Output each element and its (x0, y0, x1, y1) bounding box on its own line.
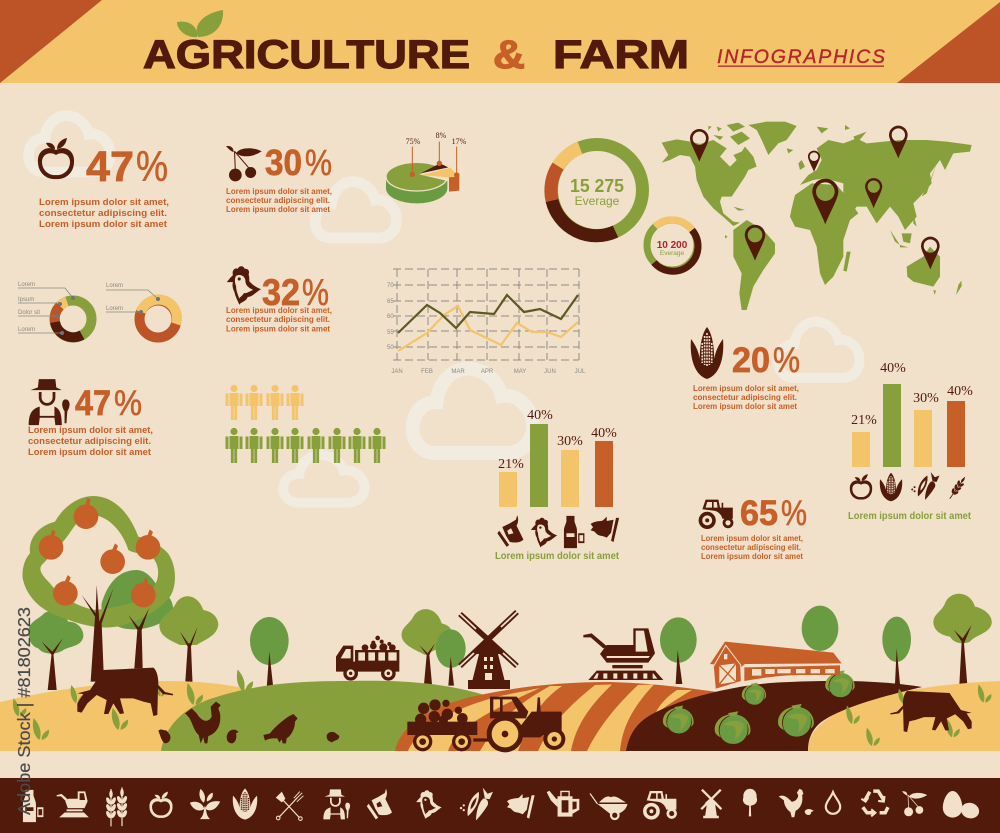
wagon (407, 699, 490, 751)
small donuts with labels (18, 282, 177, 338)
rooster (185, 702, 221, 743)
icon: cow (367, 789, 392, 819)
sprouts (13, 670, 253, 740)
icon: tractor (700, 500, 733, 527)
stat: chicken 32%: Lorem ipsum dolor sit amet, (226, 306, 332, 315)
bar chart: crops: 30% (913, 391, 939, 406)
icon: combine (57, 791, 89, 817)
3D pie chart: 75% (406, 137, 421, 146)
stat: tractor 65% (700, 494, 807, 561)
stat: farmer 47%: Lorem ipsum dolor sit amet, (28, 425, 153, 436)
stat: apples 47%: Lorem ipsum dolor sit amet, (39, 197, 169, 208)
map: location pins (690, 126, 940, 269)
line chart: 70 (387, 283, 394, 289)
stat: chicken 32%: Lorem ipsum dolor sit amet (226, 324, 330, 334)
stat: tractor 65%: consectetur adipiscing elit. (701, 543, 801, 552)
line chart: 60 (387, 314, 394, 320)
icon: cherries (902, 791, 927, 816)
icons: crops (850, 472, 968, 501)
icon: farmer (29, 379, 70, 425)
icon: wheat (105, 787, 128, 826)
trees: left (22, 496, 466, 690)
icons: livestock (497, 515, 619, 548)
stat: chicken 32%: consectetur adipiscing elit. (226, 315, 330, 324)
icon: windmill (701, 790, 721, 818)
stat: cherries 30%: Lorem ipsum dolor sit amet (226, 205, 330, 214)
bar chart: livestock: 40% (527, 408, 553, 423)
bar chart: crops: 40% (947, 384, 973, 399)
pictogram: people (226, 385, 386, 463)
title: & (493, 33, 525, 77)
stat: corn 20%: Lorem ipsum dolor sit amet, (693, 384, 799, 393)
stat: tractor 65%: % (781, 494, 807, 533)
donut: 10 200: 10 200 (657, 240, 688, 251)
stat: apples 47%: Lorem ipsum dolor sit amet (39, 219, 168, 230)
donut right (140, 300, 177, 338)
icon: sprout (190, 789, 220, 819)
line chart: JUN (544, 369, 556, 375)
stat: apples 47% (38, 138, 169, 230)
line chart: APR (481, 369, 494, 375)
stat: cherries 30%: consectetur adipiscing elit. (226, 196, 330, 205)
donut: 15 275 (551, 144, 642, 236)
icon: cherries (226, 146, 262, 181)
line chart: FEB (421, 369, 433, 375)
map: continents (662, 122, 972, 310)
stat: tractor 65%: 65 (740, 494, 778, 533)
stat: chicken 32% (226, 266, 332, 334)
icon: tree (743, 789, 757, 816)
stat: chicken 32%: % (302, 272, 329, 313)
small donuts with labels: Lorem (106, 306, 123, 312)
3D pie chart: 8% (436, 131, 447, 140)
bar chart: crops: Lorem ipsum dolor sit amet (848, 511, 972, 522)
cabbages (663, 670, 855, 745)
donut: 15 275: Everage (575, 194, 620, 208)
icon: recycle (861, 791, 888, 816)
stat: farmer 47%: Lorem ipsum dolor sit amet (28, 447, 152, 458)
stat: cherries 30%: % (305, 142, 332, 183)
stat: farmer 47%: % (114, 384, 142, 423)
bar chart: livestock (495, 408, 620, 562)
stat: tractor 65%: Lorem ipsum dolor sit amet (701, 552, 803, 561)
apples (39, 497, 160, 607)
line chart: MAY (514, 369, 526, 375)
stat: corn 20%: Lorem ipsum dolor sit amet (693, 402, 797, 411)
donut: 15 275: 15 275 (570, 176, 624, 196)
icon: water drop (826, 792, 840, 814)
stat: farmer 47% (28, 379, 153, 458)
stat: corn 20%: consectetur adipiscing elit. (693, 393, 797, 402)
stat: tractor 65%: Lorem ipsum dolor sit amet, (701, 534, 803, 543)
bar chart: crops: 21% (851, 413, 877, 428)
icon: tractor (645, 791, 676, 818)
hill: ploughed field (395, 682, 717, 751)
chicks (158, 729, 339, 743)
line chart: 50 (387, 345, 394, 351)
title: FARM (553, 33, 689, 77)
bar chart: crops (848, 361, 973, 522)
title: AGRICULTURE (143, 33, 470, 77)
stock watermark: Adobe Stock | #81802623 (14, 607, 34, 815)
icon: wheelbarrow (590, 794, 628, 819)
donut callouts (18, 288, 158, 333)
hen (263, 714, 298, 743)
world map (662, 122, 972, 310)
line chart: MAR (451, 369, 465, 375)
stat: cherries 30%: 30 (265, 142, 302, 183)
stat: corn 20% (691, 327, 800, 411)
stat: corn 20%: % (773, 341, 800, 380)
stat: corn 20%: 20 (732, 341, 770, 380)
3D pie chart (386, 131, 467, 203)
bottom icon strip (0, 778, 1000, 833)
stat: cherries 30% (226, 142, 332, 214)
line chart: JAN (391, 369, 403, 375)
small donuts with labels: Dolor sit (18, 310, 40, 316)
small donuts with labels: Lorem (18, 327, 35, 333)
tractor (487, 697, 565, 752)
bar chart: livestock: 30% (557, 434, 583, 449)
icon: spade and fork (276, 792, 303, 820)
farm landscape (0, 496, 1000, 752)
icon: apple (38, 138, 74, 179)
line chart: JUL (575, 369, 586, 375)
icon: farmer (323, 789, 350, 819)
header banner (0, 0, 1000, 83)
line chart (387, 269, 586, 375)
icon: corn (233, 788, 257, 820)
stat: chicken 32%: 32 (262, 272, 300, 313)
icon: milk bottle (23, 790, 43, 822)
icon: eggs (943, 791, 981, 820)
donut: 10 200: Everage (660, 250, 684, 257)
icon: watering can (547, 791, 579, 817)
hill: green (161, 681, 500, 751)
hill: right yellow (808, 681, 1000, 751)
bar chart: livestock: 40% (591, 426, 617, 441)
donut: 10 200 (647, 220, 698, 271)
hill: left yellow (0, 681, 270, 751)
small donuts with labels: Ipsum (18, 297, 34, 303)
icon: carrot (460, 788, 493, 820)
subtitle: INFOGRAPHICS (717, 46, 885, 68)
icon: rooster (779, 789, 814, 817)
donut left (54, 300, 92, 338)
tractor and wagon (407, 697, 565, 752)
title (143, 33, 689, 77)
bar chart: crops: 40% (880, 361, 906, 376)
small donuts with labels: Lorem (106, 283, 123, 289)
icon: pig (507, 794, 535, 819)
bar chart: livestock: 21% (498, 457, 524, 472)
cow: right (890, 691, 972, 732)
stat: farmer 47%: consectetur adipiscing elit. (28, 436, 151, 447)
3D pie chart: 17% (452, 137, 467, 146)
icon: chicken (227, 266, 261, 305)
icon: chicken (416, 790, 442, 819)
stat: cherries 30%: Lorem ipsum dolor sit amet, (226, 187, 332, 196)
icon: apple (149, 792, 173, 818)
bar chart: livestock: Lorem ipsum dolor sit amet (495, 551, 620, 562)
line chart: 65 (387, 299, 394, 305)
background clouds (29, 116, 859, 503)
line chart: 55 (387, 330, 394, 336)
combine harvester (583, 628, 663, 680)
truck (336, 636, 399, 681)
stat: apples 47%: % (136, 143, 168, 191)
stat: apples 47%: consectetur adipiscing elit. (39, 208, 167, 219)
small donuts with labels: Lorem (18, 282, 35, 288)
icon: leaves (177, 10, 223, 37)
chickens (158, 702, 339, 743)
windmill (460, 612, 517, 689)
icon: corn (691, 327, 723, 379)
stat: apples 47%: 47 (86, 143, 134, 191)
barn (710, 642, 842, 689)
hill: cabbage patch (626, 681, 922, 751)
trees: right (660, 594, 992, 685)
stat: farmer 47%: 47 (75, 384, 111, 423)
cow: left (77, 668, 173, 716)
